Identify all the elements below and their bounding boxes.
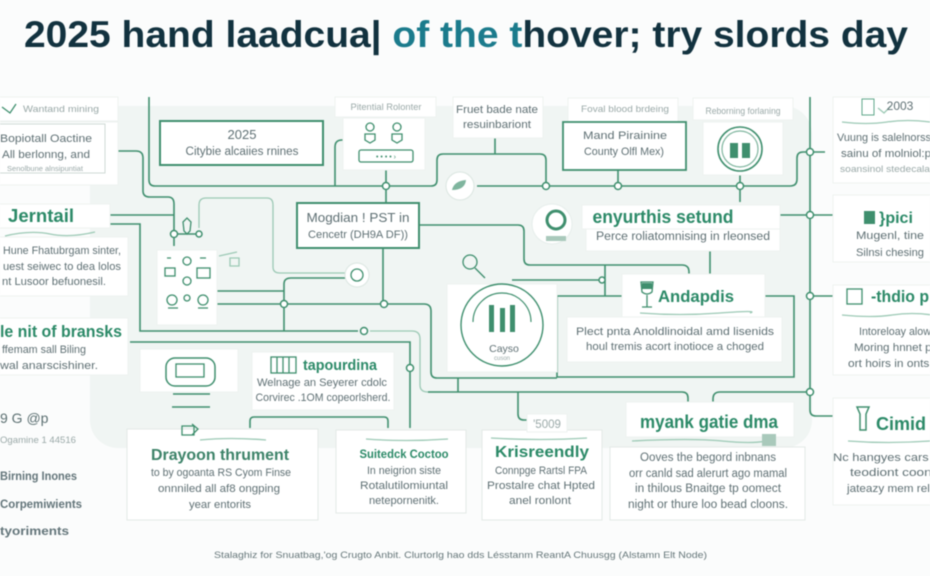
junction nodes xyxy=(170,148,814,396)
panel: Andapdis: Andapdis xyxy=(658,287,734,306)
panel: Drayoon thrument xyxy=(127,424,318,520)
panel: Food blood xyxy=(563,98,686,170)
emblem: Cayso circle xyxy=(447,255,557,372)
panel: Drayoon thrument: onnniled all af8 ongping xyxy=(158,483,280,495)
connector network xyxy=(105,97,853,428)
panel: Wantand mining: All berlonng, and xyxy=(2,149,90,161)
panel: Krisreendly: anel ronlont xyxy=(509,495,571,507)
panel: Krisreendly: Connpge Rartsl FPA xyxy=(495,465,588,477)
panel: Andapdis xyxy=(567,274,782,362)
box: 2025 xyxy=(160,121,323,165)
legend: left column: Ogamine 1 44516 xyxy=(0,435,76,446)
panel: icon group xyxy=(157,218,239,325)
panel: Wantand mining: Wantand mining xyxy=(23,104,99,115)
panel: Food blood: Mand Pirainine xyxy=(583,130,667,142)
box: 2025: Citybie alcaiies rnines xyxy=(186,146,299,158)
panel: Jerntail: Jerntail xyxy=(8,206,74,226)
panel: Reborning icon: Reborning forlaning xyxy=(706,106,780,117)
panel: Reborning icon xyxy=(693,98,793,175)
panel: myank gatie dma: night or thure loo bead cloons. xyxy=(628,499,788,511)
panel: Shdio: ort hoirs in ontsi xyxy=(848,358,930,370)
panel: Epici: }pici xyxy=(879,210,913,227)
legend: left column: tyoriments xyxy=(0,526,69,538)
panel: myank gatie dma xyxy=(610,402,805,520)
panel: Epici: Mugenl, tine xyxy=(856,230,924,242)
panel: tapourdina: tapourdina xyxy=(303,358,378,374)
panel: Krisreendly: '5009 xyxy=(533,419,561,431)
emblem: Cayso circle: cuson xyxy=(494,356,510,362)
panel: Shdio xyxy=(833,285,930,375)
icon: recycle badge xyxy=(532,204,572,244)
legend: left column: 9 G @p xyxy=(0,410,49,426)
panel: Food blood: Foval blood brdeing xyxy=(581,104,669,115)
panel: 2003 xyxy=(833,97,930,183)
panel: Wantand mining: Senolbune alnsipuntiat xyxy=(7,164,84,173)
panel: 2003: Vuung is salelnorss xyxy=(837,132,930,144)
panel: Epici xyxy=(833,195,930,262)
panel: Food blood: County Olfl Mex) xyxy=(584,146,664,158)
panel: tapourdina: Welnage an Seyerer cdolc xyxy=(257,377,387,389)
box: Magdalan PST xyxy=(297,203,419,248)
panel: Cimid: teodiont coontr xyxy=(850,467,930,479)
legend: left column: Birning Inones xyxy=(0,471,77,483)
box: Magdalan PST: Mogdian ! PST in xyxy=(306,210,410,225)
panel: Jerntail: uest seiwec to dea lolos xyxy=(3,261,121,273)
panel: Jerntail: Hune Fhatubrgam sinter, xyxy=(3,245,121,257)
panel: enyurthis setund xyxy=(582,205,780,251)
panel: tapourdina xyxy=(252,352,394,410)
icon: leaf badge xyxy=(446,172,474,200)
panel: 2003: 2003 xyxy=(887,99,914,113)
box: Magdalan PST: Cencetr (DH9A DF)) xyxy=(308,229,408,241)
panel: Fruit bade note: Fruet bade nate xyxy=(456,104,538,116)
emblem: Cayso circle: Cayso xyxy=(489,343,519,355)
panel: Drayoon thrument: year entorits xyxy=(189,499,252,511)
panel: enyurthis setund: Perce roliatomnising in rleonsed xyxy=(596,231,770,243)
panel: nit of bransks: ffemam sall Biling xyxy=(2,344,86,356)
panel: myank gatie dma: orr canld sad alerurt ago mamal xyxy=(629,468,787,480)
icon: small circle badge xyxy=(345,263,369,287)
panel: nit of bransks: le nit of bransks xyxy=(0,322,122,341)
panel: Fruit bade note xyxy=(453,97,543,138)
panel: Potential Rolunter icons xyxy=(335,97,436,170)
panel: Cimid xyxy=(833,398,930,505)
panel: icon screen xyxy=(140,349,238,407)
panel: Potential Rolunter icons: Pitential Rolonter xyxy=(350,102,422,113)
legend: left column: Corpemiwients xyxy=(0,499,82,511)
box: 2025: 2025 xyxy=(228,127,256,142)
footer note: Stalaghiz for Snuatbag,'og Crugto Anbit. Clurtorlg hao dds Lésstanm ReantA Chuusgg (Alstamn Elt Node) xyxy=(214,550,707,561)
panel: myank gatie dma: Ooves the begord inbnans xyxy=(640,452,776,464)
panel: 2003: soansinol stedecala xyxy=(840,164,930,175)
panel: Jerntail: nt Lusoor befuonesil. xyxy=(2,276,106,288)
panel: Sadeck Coctoo: netepornenitk. xyxy=(369,495,439,507)
panel: 2003: sainu of molniol:p xyxy=(841,148,930,160)
panel: Sadeck Coctoo: Suitedck Coctoo xyxy=(360,447,448,461)
panel: Andapdis: houl tremis acort inotioce a choged xyxy=(586,341,764,353)
panel: Sadeck Coctoo: Rotalutilomiuntal xyxy=(360,480,448,492)
panel: Epici: Silnsi chesing xyxy=(856,247,924,259)
panel: enyurthis setund: enyurthis setund xyxy=(592,207,734,227)
panel: Krisreendly: Prostalre chat Hpted xyxy=(487,480,595,492)
panel: nit of bransks: wal anarscishiner. xyxy=(0,360,98,372)
panel: nit of bransks xyxy=(0,318,128,375)
panel: myank gatie dma: myank gatie dma xyxy=(640,412,779,432)
panel: Andapdis: Plect pnta Anoldlinoidal amd lisenids xyxy=(576,326,775,338)
panel: myank gatie dma: in thilous Bnaitge tp oomect xyxy=(635,483,782,495)
panel: Potential Rolunter icons: • • • • › xyxy=(376,154,397,161)
panel: tapourdina: Corvirec .1OM copeorlsherd. xyxy=(256,392,390,404)
panel: Jerntail xyxy=(0,204,128,296)
panel: Wantand mining: Bopiotall Oactine xyxy=(0,133,92,145)
panel: Fruit bade note: resuinbariont xyxy=(463,119,531,131)
panel: Cimid: Cimid xyxy=(876,414,926,434)
legend: left column xyxy=(0,410,82,538)
panel: Drayoon thrument: to by ogoanta RS Cyom Finse xyxy=(151,467,291,479)
title: 2025 hand laadcua| of the thover; try slords day xyxy=(24,14,908,56)
panel: Krisreendly xyxy=(482,414,602,520)
panel: Drayoon thrument: Drayoon thrument xyxy=(151,447,290,464)
panel: Sadeck Coctoo xyxy=(336,430,466,513)
panel: Wantand mining xyxy=(0,97,118,185)
panel: Krisreendly: Krisreendly xyxy=(495,444,589,461)
panel: Sadeck Coctoo: In neigrion siste xyxy=(367,465,441,477)
